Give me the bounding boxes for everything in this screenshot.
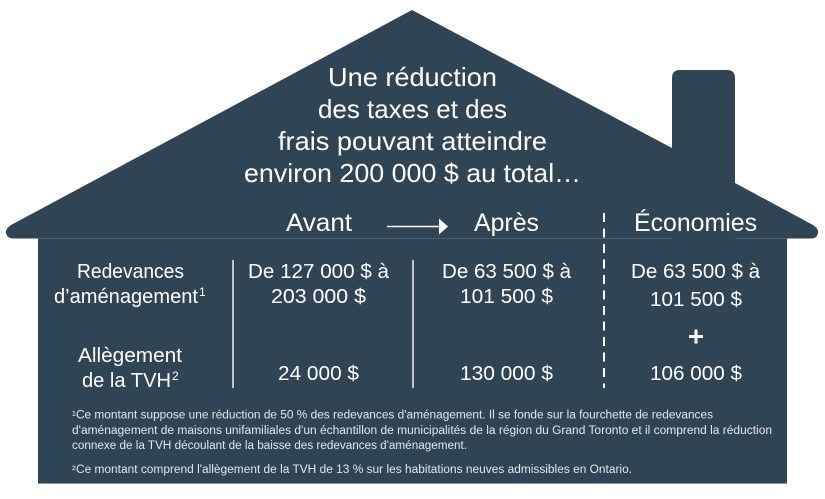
économies values: redevances: De 63 500 $ à xyxy=(631,261,761,283)
row label: allègement de la TVH xyxy=(78,345,182,392)
après values: redevances: 101 500 $ xyxy=(460,286,553,308)
après values: redevances xyxy=(442,261,572,308)
column divider: après xyxy=(412,260,414,388)
footnote 1: connexe de la TVH découlant de la baisse des redevances d'aménagement. xyxy=(72,440,467,452)
title xyxy=(244,62,581,188)
économies value: TVH: 106 000 $ xyxy=(650,363,742,385)
avant values: redevances: De 127 000 $ à xyxy=(248,261,390,283)
économies values: redevances xyxy=(631,261,761,311)
arrow: avant to après xyxy=(387,218,448,234)
avant value: TVH: 24 000 $ xyxy=(278,363,359,385)
footnote 2: ²Ce montant comprend l'allègement de la TVH de 13 % sur les habitations neuves admissibles en Ontario. xyxy=(72,464,632,476)
title: environ 200 000 $ au total… xyxy=(244,158,581,188)
footnote 1: d'aménagement de maisons unifamiliales d'un échantillon de municipalités de la région du Grand Toronto et il comprend la réduction xyxy=(72,425,772,437)
économies values: redevances: 101 500 $ xyxy=(650,289,742,311)
title: Une réduction xyxy=(328,62,497,92)
column heading: Après: Après xyxy=(474,209,539,237)
column heading: Avant: Avant xyxy=(286,209,352,237)
row label: redevances d'aménagement: d’aménagement xyxy=(54,286,198,308)
column heading: Économies: Économies xyxy=(634,208,757,237)
avant values: redevances xyxy=(248,261,390,308)
après values: redevances: De 63 500 $ à xyxy=(442,261,572,283)
plus sign xyxy=(689,330,703,344)
row label: allègement de la TVH: Allègement xyxy=(78,345,182,367)
row label: allègement de la TVH: 2 xyxy=(172,369,179,383)
row label: redevances d'aménagement: 1 xyxy=(199,285,206,299)
avant values: redevances: 203 000 $ xyxy=(271,286,366,308)
row label: redevances d'aménagement: Redevances xyxy=(77,261,184,283)
roof with chimney xyxy=(6,10,818,238)
column divider: avant xyxy=(232,260,234,388)
house body xyxy=(38,236,787,484)
title: des taxes et des xyxy=(318,94,507,124)
row label: redevances d'aménagement xyxy=(54,261,206,308)
footnote 1: ¹Ce montant suppose une réduction de 50 % des redevances d'aménagement. Il se fonde sur la fourchette de redevances xyxy=(72,410,713,422)
row label: allègement de la TVH: de la TVH xyxy=(82,370,171,392)
après value: TVH: 130 000 $ xyxy=(460,363,553,385)
dashed divider xyxy=(603,213,605,388)
footnote 1 xyxy=(72,410,772,452)
title: frais pouvant atteindre xyxy=(278,126,547,156)
